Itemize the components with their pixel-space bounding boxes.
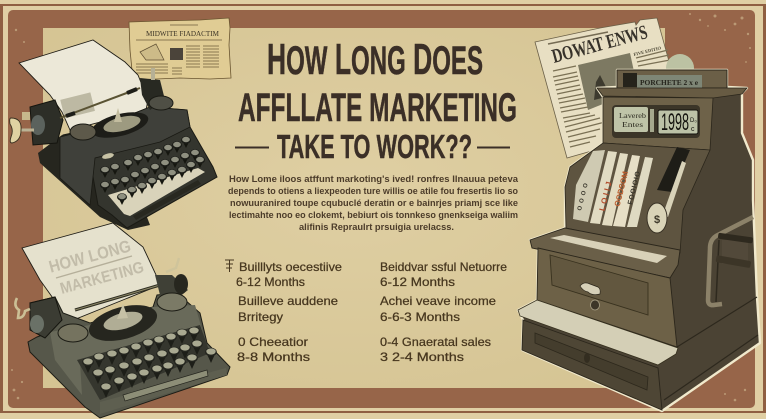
- icon: small newspaper: [129, 18, 231, 80]
- register top box: PORCHETE 2 x e: [640, 78, 699, 87]
- icon: upper typewriter: [10, 40, 217, 230]
- body text: [228, 173, 519, 232]
- list item 2: Builleve auddene: [238, 294, 338, 308]
- register drums: [565, 143, 710, 253]
- register upper front: [603, 97, 713, 150]
- icon: large newspaper: DOWAT ENWS: [550, 21, 650, 68]
- title line 1: HOW LONG DOES: [267, 35, 483, 84]
- list item 1: Builllyts oecestiive: [239, 260, 342, 274]
- list item 4: [380, 260, 507, 289]
- register body silhouette: [518, 70, 760, 411]
- list item 6: [380, 335, 491, 364]
- register drums: OODSOM: [613, 170, 630, 207]
- register crank: [708, 217, 753, 305]
- list: right column: [380, 260, 507, 364]
- list item 1: [225, 260, 342, 289]
- list item 6: 0-4 Gnaeratal sales: [380, 335, 491, 349]
- icon: cash register: [518, 70, 760, 411]
- list item 5: 6-6-3 Months: [380, 310, 460, 324]
- panel: cream paper: [43, 28, 665, 388]
- register drums: OOOO: [577, 182, 590, 211]
- keys: [100, 136, 205, 205]
- body text: alifinis Repraulrt prsuigia urelacss.: [299, 221, 454, 232]
- title: [238, 35, 517, 165]
- list item 4: 6-12 Months: [380, 275, 455, 289]
- body text: lectimahte noo eo clokemt, bebiurt ois tonnkeso gnenkseiga waliim: [229, 209, 518, 220]
- register drums: LOIIJ: [598, 181, 614, 212]
- icon: large newspaper: [535, 18, 700, 158]
- body text: How Lome iloos atffunt markoting's ived! ronfres Ilnauua peteva: [229, 173, 519, 184]
- register drawer: [537, 248, 677, 347]
- list item 3: [237, 335, 310, 364]
- list item 1: 6-12 Months: [236, 275, 305, 289]
- body text: nowuuranired toupe cqubuclé deratin or e bainrjes priamj sce Iike: [230, 197, 518, 208]
- icon: large newspaper: FIVE EDITIO: [633, 45, 662, 57]
- title line 2: AFFLLATE MARKETING: [238, 86, 517, 130]
- keys: [82, 327, 217, 398]
- register top box: [597, 70, 747, 98]
- list item 6: 3 2-4 Months: [380, 350, 464, 364]
- icon: small newspaper: MIDWITE FIADACTIM: [146, 30, 220, 38]
- list item 2: Brritegy: [238, 310, 283, 324]
- register display: D₀: [690, 118, 697, 124]
- icon: lower typewriter: [15, 223, 230, 418]
- register display: Lavereb: [619, 111, 646, 120]
- list item 5: Achei veave income: [380, 294, 496, 308]
- title line 3: TAKE TO WORK??: [277, 128, 472, 165]
- register display: c: [691, 126, 695, 133]
- list item 2: [238, 294, 338, 324]
- body text: depends to otiens a liexpeoden ture willis oe atile fou fresertis lio so: [228, 185, 518, 196]
- register display: Entes: [622, 120, 643, 129]
- list item 5: [380, 294, 496, 324]
- register base side line: [664, 297, 758, 400]
- register display: 1998: [661, 109, 689, 136]
- list item 3: 8-8 Months: [237, 350, 310, 364]
- decorative pale shape behind register: [666, 54, 694, 82]
- register foot plate: [518, 300, 678, 365]
- register drums: FOOIOIO: [627, 170, 642, 205]
- register base: [522, 320, 662, 410]
- register drums: $: [654, 214, 660, 226]
- list item 4: Beiddvar ssful Netuorre: [380, 260, 507, 274]
- register shelf: [530, 228, 680, 278]
- typewriter paper with text: [22, 223, 160, 323]
- list item 3: 0 Cheeatior: [238, 335, 308, 349]
- typewriter paper with text: MARKETING: [58, 259, 146, 298]
- typewriter paper: [19, 40, 148, 130]
- register display: [612, 105, 700, 138]
- list: left column: [225, 260, 342, 364]
- typewriter paper with text: HOW LONG: [47, 236, 133, 277]
